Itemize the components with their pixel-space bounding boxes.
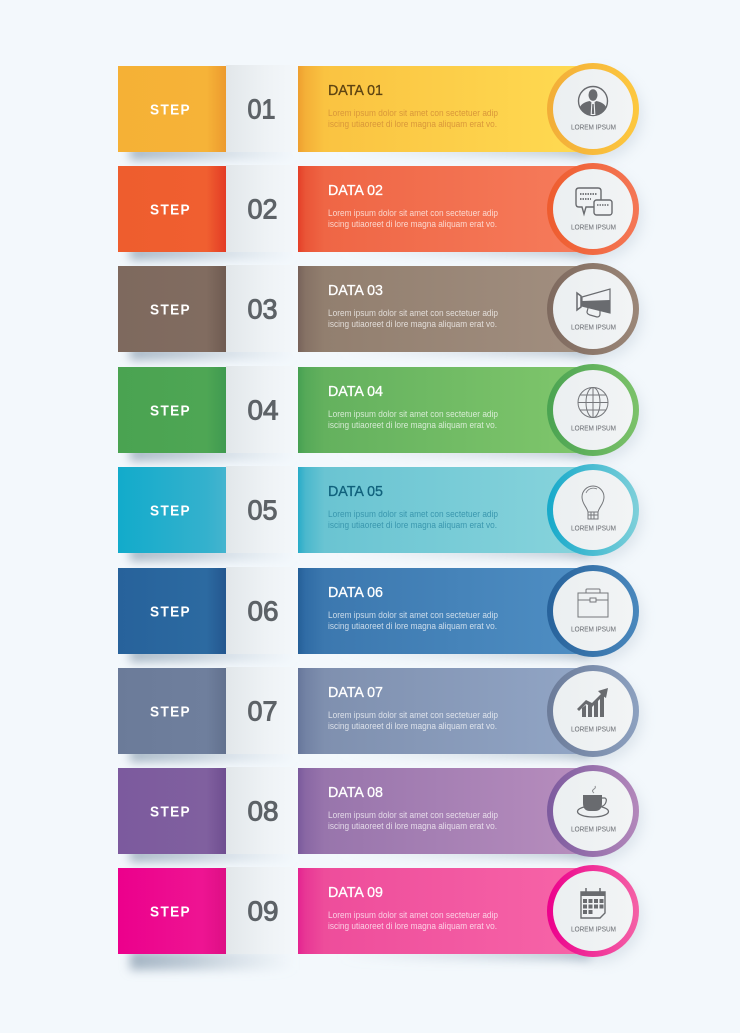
badge — [547, 665, 639, 757]
number tile: 02 — [248, 194, 278, 224]
number tile: 08 — [248, 796, 278, 826]
step tile: STEP — [150, 502, 191, 520]
step tile — [118, 868, 226, 954]
data band: Lorem ipsum dolor sit amet con sectetuer adip — [328, 108, 498, 118]
number tile: 07 — [248, 696, 278, 726]
data band: DATA 05 — [328, 484, 383, 500]
number tile — [226, 767, 298, 854]
step tile — [118, 166, 226, 252]
data band — [298, 367, 593, 453]
step tile — [118, 568, 226, 654]
drop shadows — [130, 674, 642, 762]
number tile: 01 — [248, 94, 276, 124]
drop shadows — [130, 373, 642, 461]
data band: DATA 04 — [328, 384, 383, 400]
step tile — [118, 66, 226, 152]
data band: iscing utiaoreet di lore magna aliquam erat vo. — [328, 921, 497, 931]
step row 03 — [118, 263, 642, 360]
data band: Lorem ipsum dolor sit amet con sectetuer adip — [328, 810, 498, 820]
data band — [298, 266, 593, 352]
step tile: STEP — [150, 202, 191, 218]
icon: calendar — [581, 888, 605, 918]
drop shadows — [130, 574, 642, 662]
data band — [298, 668, 593, 754]
data band — [298, 467, 593, 553]
badge — [547, 364, 639, 456]
data band — [298, 166, 593, 252]
badge — [547, 565, 639, 657]
data band: Lorem ipsum dolor sit amet con sectetuer adip — [328, 208, 498, 218]
number tile — [226, 466, 298, 553]
badge: LOREM IPSUM — [571, 426, 616, 432]
step tile — [118, 367, 226, 453]
badge — [547, 63, 639, 155]
drop shadows — [130, 774, 642, 862]
step row 04 — [118, 364, 642, 461]
data band: DATA 01 — [328, 83, 383, 99]
drop shadows — [130, 72, 642, 160]
badge: LOREM IPSUM — [571, 926, 616, 934]
data band: iscing utiaoreet di lore magna aliquam erat vo. — [328, 621, 497, 631]
step row 06 — [118, 565, 642, 662]
number tile — [226, 867, 298, 954]
step tile: STEP — [150, 804, 191, 820]
icon: briefcase — [578, 589, 608, 617]
step tile — [118, 668, 226, 754]
number tile — [226, 165, 298, 252]
data band: Lorem ipsum dolor sit amet con sectetuer adip — [328, 509, 498, 519]
badge: LOREM IPSUM — [571, 324, 616, 332]
badge — [547, 163, 639, 255]
icon: chat bubbles — [576, 188, 612, 215]
number tile — [226, 567, 298, 654]
number tile: 09 — [248, 896, 278, 926]
step tile — [118, 768, 226, 854]
step tile — [118, 266, 226, 352]
step row 02 — [118, 163, 642, 260]
step row 01 — [118, 63, 642, 160]
data band: iscing utiaoreet di lore magna aliquam erat vo. — [328, 821, 497, 831]
drop shadows — [130, 473, 642, 561]
data band: iscing utiaoreet di lore magna aliquam erat vo. — [328, 119, 497, 129]
badge: LOREM IPSUM — [571, 224, 616, 232]
badge — [547, 765, 639, 857]
data band: Lorem ipsum dolor sit amet con sectetuer adip — [328, 409, 498, 419]
icon: businessman — [578, 86, 608, 116]
step tile: STEP — [150, 704, 191, 720]
data band: DATA 09 — [328, 885, 383, 901]
badge: LOREM IPSUM — [571, 124, 616, 132]
data band — [298, 568, 593, 654]
badge: LOREM IPSUM — [571, 726, 616, 734]
step row 05 — [118, 464, 642, 561]
data band — [298, 868, 593, 954]
number tile: 03 — [248, 294, 278, 324]
badge — [547, 464, 639, 556]
data band: Lorem ipsum dolor sit amet con sectetuer adip — [328, 910, 498, 920]
step tile: STEP — [150, 102, 191, 118]
data band: iscing utiaoreet di lore magna aliquam erat vo. — [328, 721, 497, 731]
badge: LOREM IPSUM — [571, 826, 616, 834]
badge — [547, 865, 639, 957]
number tile: 05 — [248, 494, 278, 526]
step row 08 — [118, 765, 642, 862]
number tile — [226, 265, 298, 352]
data band: DATA 08 — [328, 785, 383, 801]
data band — [298, 768, 593, 854]
step row 09 — [118, 865, 642, 970]
drop shadows — [130, 874, 642, 970]
data band: DATA 06 — [328, 585, 383, 601]
data band: iscing utiaoreet di lore magna aliquam erat vo. — [328, 420, 497, 430]
step tile: STEP — [150, 402, 191, 420]
badge: LOREM IPSUM — [571, 626, 616, 634]
data band: Lorem ipsum dolor sit amet con sectetuer adip — [328, 710, 498, 720]
number tile: 06 — [248, 596, 278, 626]
step tile: STEP — [150, 604, 191, 620]
icon: globe — [578, 388, 608, 418]
number tile — [226, 667, 298, 754]
badge — [547, 263, 639, 355]
icon: megaphone — [577, 289, 610, 317]
step tile — [118, 467, 226, 553]
data band: iscing utiaoreet di lore magna aliquam erat vo. — [328, 319, 497, 329]
number tile — [226, 366, 298, 453]
step row 07 — [118, 665, 642, 762]
data band — [298, 66, 593, 152]
icon: light bulb — [582, 486, 604, 519]
icon: rising chart — [577, 688, 608, 717]
data band: DATA 07 — [328, 685, 383, 701]
drop shadows — [130, 172, 642, 260]
data band: DATA 03 — [328, 283, 383, 299]
number tile — [226, 65, 298, 152]
step tile: STEP — [150, 302, 191, 318]
badge: LOREM IPSUM — [571, 526, 616, 532]
data band: iscing utiaoreet di lore magna aliquam erat vo. — [328, 520, 497, 530]
step tile: STEP — [150, 904, 191, 920]
data band: iscing utiaoreet di lore magna aliquam erat vo. — [328, 219, 497, 229]
data band: Lorem ipsum dolor sit amet con sectetuer adip — [328, 610, 498, 620]
drop shadows — [130, 272, 642, 360]
number tile: 04 — [248, 394, 278, 426]
icon: coffee cup — [578, 786, 608, 817]
data band: DATA 02 — [328, 183, 383, 199]
data band: Lorem ipsum dolor sit amet con sectetuer adip — [328, 308, 498, 318]
